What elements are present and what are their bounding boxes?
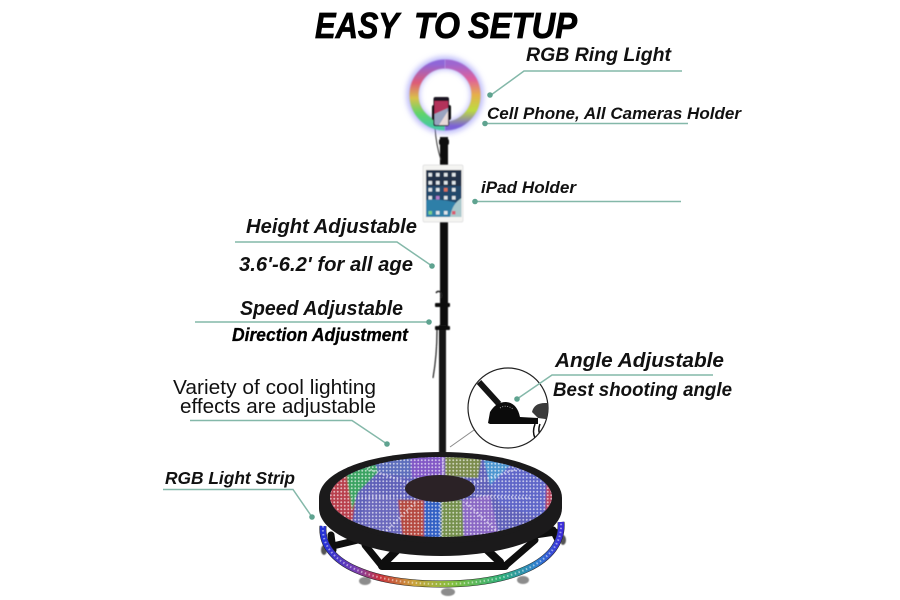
label: Angle Adjustable: Best shooting angle — [553, 379, 732, 401]
title — [315, 5, 578, 46]
stand pole — [433, 127, 450, 455]
label: Angle Adjustable: Angle Adjustable — [554, 349, 724, 372]
label: RGB Light Strip — [163, 468, 315, 520]
rim front shading — [330, 497, 552, 543]
label: Height Adjustable: 3.6'-6.2' for all age — [239, 253, 413, 276]
label: iPad Holder — [472, 178, 681, 204]
center disc — [405, 475, 475, 502]
label: RGB Light Strip: RGB Light Strip — [165, 468, 295, 488]
light strip ring — [323, 522, 561, 584]
label: lighting effects: effects are adjustable — [180, 396, 376, 418]
label: Speed Adjustable: Direction Adjustment — [232, 325, 409, 345]
title: SETUP — [468, 5, 578, 46]
label: Speed Adjustable: Speed Adjustable — [240, 298, 403, 320]
label: Cell Phone holder: Cell Phone, All Cameras Holder — [487, 105, 743, 123]
label: Speed Adjustable — [195, 298, 432, 345]
icon: RGB ring light — [413, 63, 477, 127]
frame struts — [331, 530, 558, 566]
label: RGB Ring Light: RGB Ring Light — [526, 44, 673, 66]
platform rim — [319, 452, 562, 556]
icon: phone in holder — [432, 97, 451, 126]
label: lighting effects — [173, 377, 390, 447]
label: RGB Ring Light — [487, 44, 682, 98]
icon: iPad — [423, 165, 463, 222]
infinity mirror lights — [330, 457, 552, 537]
turntable base — [319, 452, 566, 596]
icon: feet — [321, 535, 566, 596]
inset: angle detail — [450, 368, 552, 448]
label: Height Adjustable: Height Adjustable — [246, 215, 417, 238]
label: lighting effects: Variety of cool lighting — [173, 377, 376, 399]
label: Angle Adjustable — [514, 349, 732, 402]
title: EASY — [315, 5, 402, 46]
label: Height Adjustable — [235, 215, 435, 276]
label: iPad Holder: iPad Holder — [481, 178, 577, 197]
title: TO — [414, 5, 460, 46]
